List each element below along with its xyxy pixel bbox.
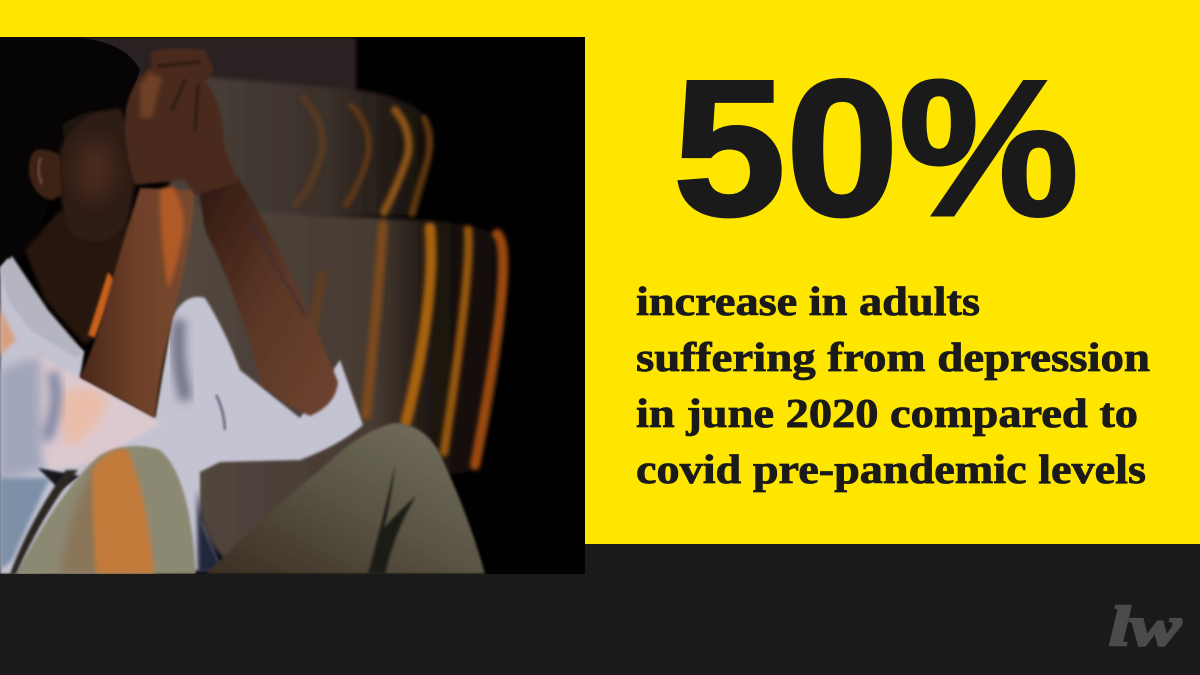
line 4: covid pre-pandemic levels xyxy=(636,446,1146,492)
shirt xyxy=(0,258,363,574)
clasped hands xyxy=(125,48,240,195)
collar xyxy=(0,256,84,358)
line 1: increase in adults xyxy=(636,278,980,324)
footer: dark band xyxy=(0,544,1200,675)
left knee with orange light xyxy=(16,446,196,574)
upper cushion xyxy=(170,74,434,216)
ear xyxy=(29,150,62,200)
photo: person with head in hands xyxy=(0,37,585,574)
statistic description xyxy=(636,278,1150,492)
orange light stripes on cushions xyxy=(296,98,503,465)
big number: 50%: 50% xyxy=(673,40,1079,257)
near forearm xyxy=(80,188,195,418)
line 2: suffering from depression xyxy=(636,334,1150,380)
hair xyxy=(58,37,140,98)
far forearm with tattoo xyxy=(198,178,338,416)
face xyxy=(59,108,140,242)
right knee trousers xyxy=(206,423,485,574)
line 3: in june 2020 compared to xyxy=(636,390,1138,436)
lower cushion xyxy=(170,206,510,560)
sleeve lit by warm light xyxy=(30,350,160,470)
logo: LW monogram: lw xyxy=(1109,596,1182,658)
neck and chest xyxy=(25,210,140,345)
wall behind the person xyxy=(72,37,358,91)
